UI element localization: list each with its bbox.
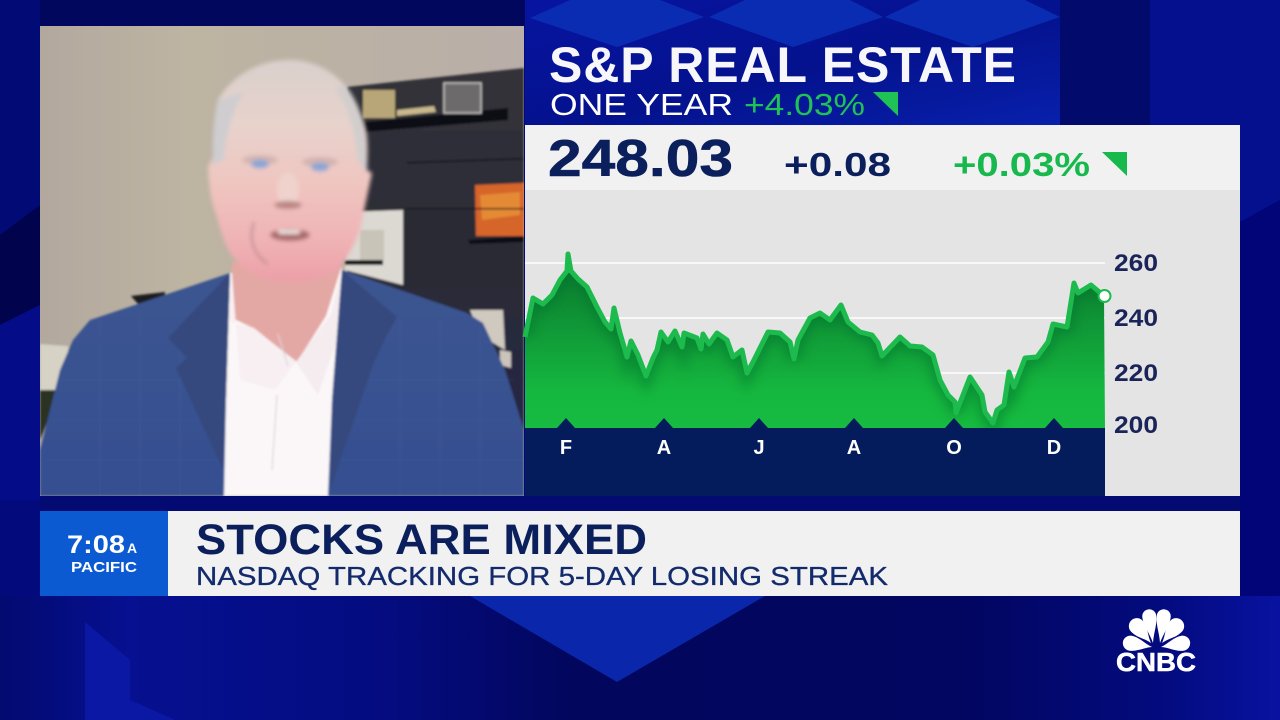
month labels: O (946, 437, 962, 459)
time box (40, 511, 168, 596)
bed and plant at left (40, 292, 165, 440)
month labels: J (753, 437, 765, 459)
time box: PACIFIC (71, 559, 137, 576)
subheadline: NASDAQ TRACKING FOR 5-DAY LOSING STREAK (196, 561, 889, 591)
neck and shirt (224, 262, 342, 496)
chart panel (525, 125, 1240, 496)
month labels (560, 437, 1061, 459)
month labels: F (560, 437, 572, 459)
head (208, 60, 372, 282)
current value marker (1098, 290, 1110, 302)
up triangle (1102, 152, 1127, 176)
peacock feathers (1122, 608, 1191, 654)
area chart (525, 254, 1110, 428)
x-axis band (525, 418, 1105, 496)
y-axis labels: 240 (1114, 305, 1158, 332)
price: 248.03 (548, 130, 733, 188)
CNBC logo (1116, 608, 1196, 677)
y-axis labels: 220 (1114, 360, 1158, 387)
month labels: A (847, 437, 861, 459)
headline: STOCKS ARE MIXED (196, 516, 647, 564)
month labels: D (1047, 437, 1061, 459)
time box: 7:08 (67, 531, 125, 559)
one year change: +4.03% (744, 87, 865, 122)
CNBC logo: CNBC (1116, 647, 1196, 677)
month labels: A (657, 437, 671, 459)
y-axis labels: 200 (1114, 412, 1158, 439)
month ticks (557, 418, 1063, 428)
y-axis labels: 260 (1114, 250, 1158, 277)
bookshelf wall (344, 66, 524, 430)
percent change: +0.03% (953, 146, 1090, 183)
suit check pattern (45, 310, 524, 496)
suit jacket (40, 270, 524, 496)
y-axis labels (1114, 250, 1158, 439)
one year label: ONE YEAR (550, 87, 733, 122)
headline box (168, 511, 1240, 596)
title: S&P Real Estate (549, 37, 1016, 122)
video panel: guest speaker (40, 26, 524, 496)
point change: +0.08 (784, 146, 891, 183)
up triangle (873, 92, 898, 116)
lower third banner (40, 511, 1240, 596)
quote header strip (525, 125, 1240, 190)
time box: A (127, 540, 137, 556)
lapels (168, 270, 397, 490)
grid lines (525, 263, 1105, 373)
title: S&P Real Estate: S&P REAL ESTATE (549, 37, 1016, 93)
